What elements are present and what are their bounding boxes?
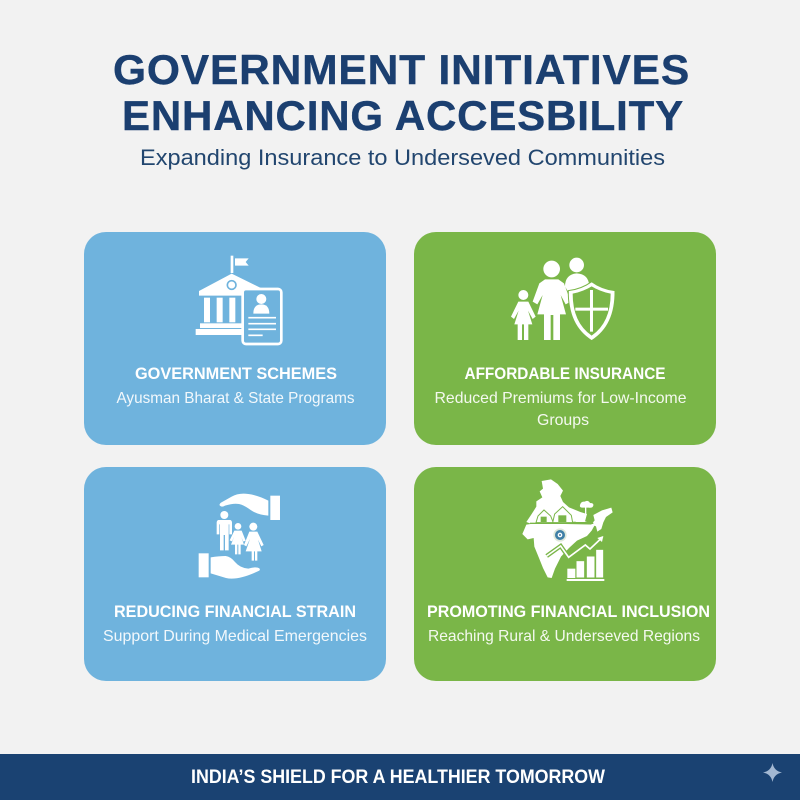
panel: promoting financial inclusion (414, 467, 716, 681)
panel: affordable insurance (414, 232, 716, 445)
heading: promoting financial inclusion: PROMOTING FINANCIAL INCLUSION (427, 603, 710, 621)
heading: affordable insurance: AFFORDABLE INSURANCE (464, 365, 666, 383)
panel: government schemes (84, 232, 386, 445)
panel: reducing financial strain (84, 467, 386, 681)
title (113, 46, 690, 139)
icon: family with shield (511, 258, 615, 341)
footer banner (0, 754, 800, 800)
footer text: INDIA’S SHIELD FOR A HEALTHIER TOMORROW (191, 767, 605, 788)
text: affordable insurance description (434, 390, 687, 429)
text: affordable insurance description: Groups (537, 412, 589, 429)
icon: hands protecting family (199, 494, 280, 579)
title: ENHANCING ACCESBILITY (122, 92, 684, 139)
heading: government schemes: GOVERNMENT SCHEMES (135, 365, 337, 383)
icon: government building and ID card (196, 256, 281, 344)
icon: sparkle (763, 763, 782, 782)
heading: reducing financial strain: REDUCING FINANCIAL STRAIN (114, 603, 356, 621)
title: GOVERNMENT INITIATIVES (113, 46, 690, 93)
icon: India map with growth chart (522, 479, 613, 581)
subtitle: Expanding Insurance to Underseved Communities (140, 145, 665, 170)
text: government schemes description: Ayusman Bharat & State Programs (116, 390, 354, 407)
text: reducing financial strain description: Support During Medical Emergencies (103, 628, 367, 645)
text: promoting financial inclusion description: Reaching Rural & Underseved Regions (428, 628, 700, 645)
text: affordable insurance description: Reduced Premiums for Low-Income (434, 390, 687, 407)
